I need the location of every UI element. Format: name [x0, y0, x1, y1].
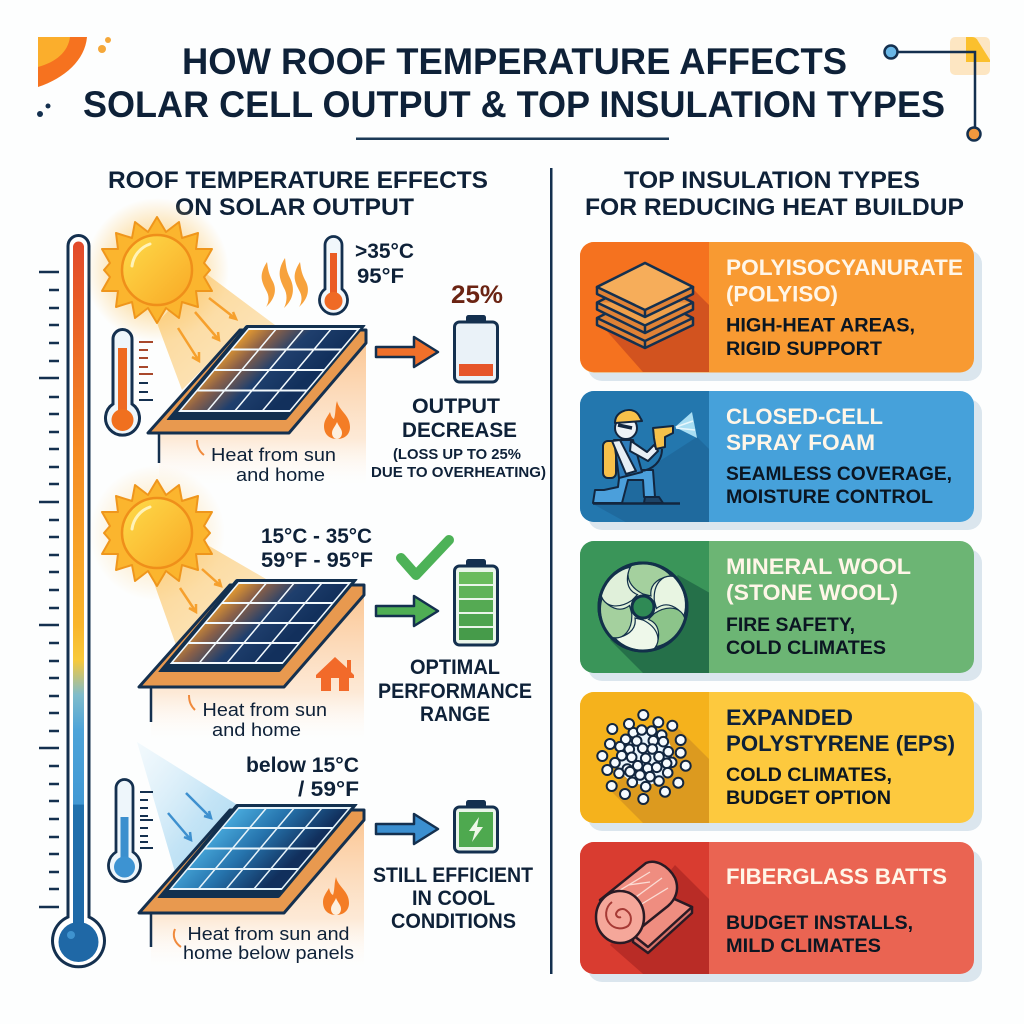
text: MOISTURE CONTROL	[726, 487, 933, 508]
text	[726, 554, 911, 659]
text: SEAMLESS COVERAGE,	[726, 464, 952, 485]
icon: low battery	[454, 315, 498, 382]
solar panel	[158, 579, 358, 672]
icon: heat waves	[262, 258, 308, 308]
heading: roof temperature effects: ROOF TEMPERATURE EFFECTS	[108, 167, 488, 194]
roof and wall	[139, 810, 364, 972]
label: heat from sun and home: and home	[236, 465, 325, 485]
icon: thermometer hot left	[106, 330, 153, 435]
sun ray arrows	[180, 569, 221, 612]
solar panel	[166, 325, 366, 420]
text: RIGID SUPPORT	[726, 339, 882, 360]
text: COLD CLIMATES,	[726, 765, 892, 786]
heading: top insulation types	[585, 167, 964, 221]
text: (POLYISO)	[726, 282, 838, 306]
label: above 35C	[355, 240, 414, 288]
label: 25 percent: 25%	[451, 281, 503, 309]
label: above 35C: >35°C	[355, 240, 414, 263]
text: BUDGET OPTION	[726, 788, 891, 809]
label: still efficient in cool conditions: IN COOL	[412, 887, 495, 910]
text: MILD CLIMATES	[726, 936, 881, 957]
label: heat from sun and home: Heat from sun	[211, 445, 336, 465]
label: heat from sun and home: Heat from sun	[202, 700, 327, 720]
panel: fiberglass batts	[580, 842, 982, 982]
title: SOLAR CELL OUTPUT & TOP INSULATION TYPES	[83, 84, 945, 125]
sun glow and beam	[89, 465, 266, 645]
icon: house	[316, 657, 354, 691]
label: optimal performance range: OPTIMAL	[410, 656, 500, 679]
label: optimal performance range: RANGE	[420, 703, 490, 726]
label: optimal performance range: PERFORMANCE	[378, 680, 532, 703]
icon: foam beads	[597, 710, 691, 804]
text: BUDGET INSTALLS,	[726, 913, 913, 934]
text: EXPANDED	[726, 705, 853, 730]
heading: top insulation types: TOP INSULATION TYPES	[624, 167, 920, 194]
section: cool below 15C	[108, 742, 533, 972]
text	[726, 404, 952, 508]
icon: worker spraying	[593, 410, 697, 504]
text: FIRE SAFETY,	[726, 615, 855, 636]
panel: mineral wool	[580, 541, 982, 681]
icon: sun	[102, 480, 212, 586]
decoration: top left sun corner	[37, 37, 111, 117]
label: output decrease: DUE TO OVERHEATING)	[371, 464, 546, 481]
icon: wool swirl	[591, 561, 695, 653]
text: CLOSED-CELL	[726, 404, 883, 429]
icon: charged battery	[454, 800, 498, 852]
text	[726, 705, 955, 809]
sun glow and beam	[85, 198, 275, 390]
label: output decrease: (LOSS UP TO 25%	[393, 446, 521, 463]
label: below 15C: below 15°C	[246, 754, 359, 777]
text: MINERAL WOOL	[726, 554, 911, 579]
arrow: to full battery	[376, 596, 438, 626]
panel: expanded polystyrene	[580, 692, 982, 831]
label: still efficient in cool conditions	[373, 864, 533, 933]
label: 15 to 35C: 59°F - 95°F	[261, 549, 373, 572]
title: HOW ROOF TEMPERATURE AFFECTS	[182, 41, 847, 82]
label: output decrease	[371, 395, 546, 481]
label: still efficient in cool conditions: STILL EFFICIENT	[373, 864, 533, 887]
large thermometer with scale	[39, 236, 105, 967]
label: output decrease: DECREASE	[402, 419, 517, 442]
icon: flame	[323, 877, 349, 915]
panel: closed-cell spray foam	[580, 391, 982, 530]
heading: top insulation types: FOR REDUCING HEAT BUILDUP	[585, 194, 964, 221]
section: optimal 15 to 35C	[89, 465, 532, 745]
label: heat from sun and home	[211, 445, 336, 485]
label: below 15C	[246, 754, 359, 801]
heading: roof temperature effects: ON SOLAR OUTPUT	[175, 194, 414, 221]
arrow: to charged battery	[376, 814, 438, 844]
icon: insulation roll	[596, 862, 692, 953]
icon: thermometer hot top	[320, 236, 348, 314]
label: heat from sun and home: and home	[212, 720, 301, 740]
icon: full battery	[454, 559, 498, 645]
label: output decrease: OUTPUT	[412, 395, 500, 418]
text: HIGH-HEAT AREAS,	[726, 316, 915, 336]
label: heat from sun and home	[202, 700, 327, 740]
label: 15 to 35C	[261, 525, 373, 572]
text: FIBERGLASS BATTS	[726, 864, 947, 889]
label: heat from sun and home below panels: home below panels	[183, 943, 354, 963]
label: still efficient in cool conditions: CONDITIONS	[391, 910, 516, 933]
decoration: top right connector	[884, 37, 990, 140]
text	[726, 864, 947, 957]
label: heat from sun and home below panels: Heat from sun and	[188, 924, 350, 944]
solar panel	[157, 804, 358, 898]
label: above 35C: 95°F	[357, 265, 404, 288]
arrow: to low battery	[376, 337, 438, 367]
icon: flame	[324, 401, 350, 439]
text: (STONE WOOL)	[726, 580, 898, 605]
icon: thermometer cold	[108, 780, 153, 882]
icon: stacked boards	[597, 263, 693, 348]
roof and wall	[139, 585, 364, 745]
label: below 15C: / 59°F	[298, 778, 359, 801]
section: hot roof above 35C	[85, 198, 546, 490]
text: COLD CLIMATES	[726, 638, 886, 659]
sun ray arrows	[178, 298, 236, 361]
text	[726, 255, 963, 360]
text: POLYISOCYANURATE	[726, 255, 963, 280]
cool light beam	[137, 742, 236, 872]
icon: sun	[102, 217, 212, 323]
panel: polyisocyanurate	[580, 242, 982, 381]
label: heat from sun and home below panels	[183, 924, 354, 963]
title	[83, 41, 945, 125]
icon: check mark	[401, 540, 449, 575]
text: SPRAY FOAM	[726, 430, 875, 455]
cool ray arrows	[168, 793, 211, 840]
label: optimal performance range	[378, 656, 532, 726]
label: 15 to 35C: 15°C - 35°C	[261, 525, 372, 548]
heading: roof temperature effects	[108, 167, 488, 221]
roof and wall	[148, 330, 366, 490]
text: POLYSTYRENE (EPS)	[726, 731, 955, 756]
